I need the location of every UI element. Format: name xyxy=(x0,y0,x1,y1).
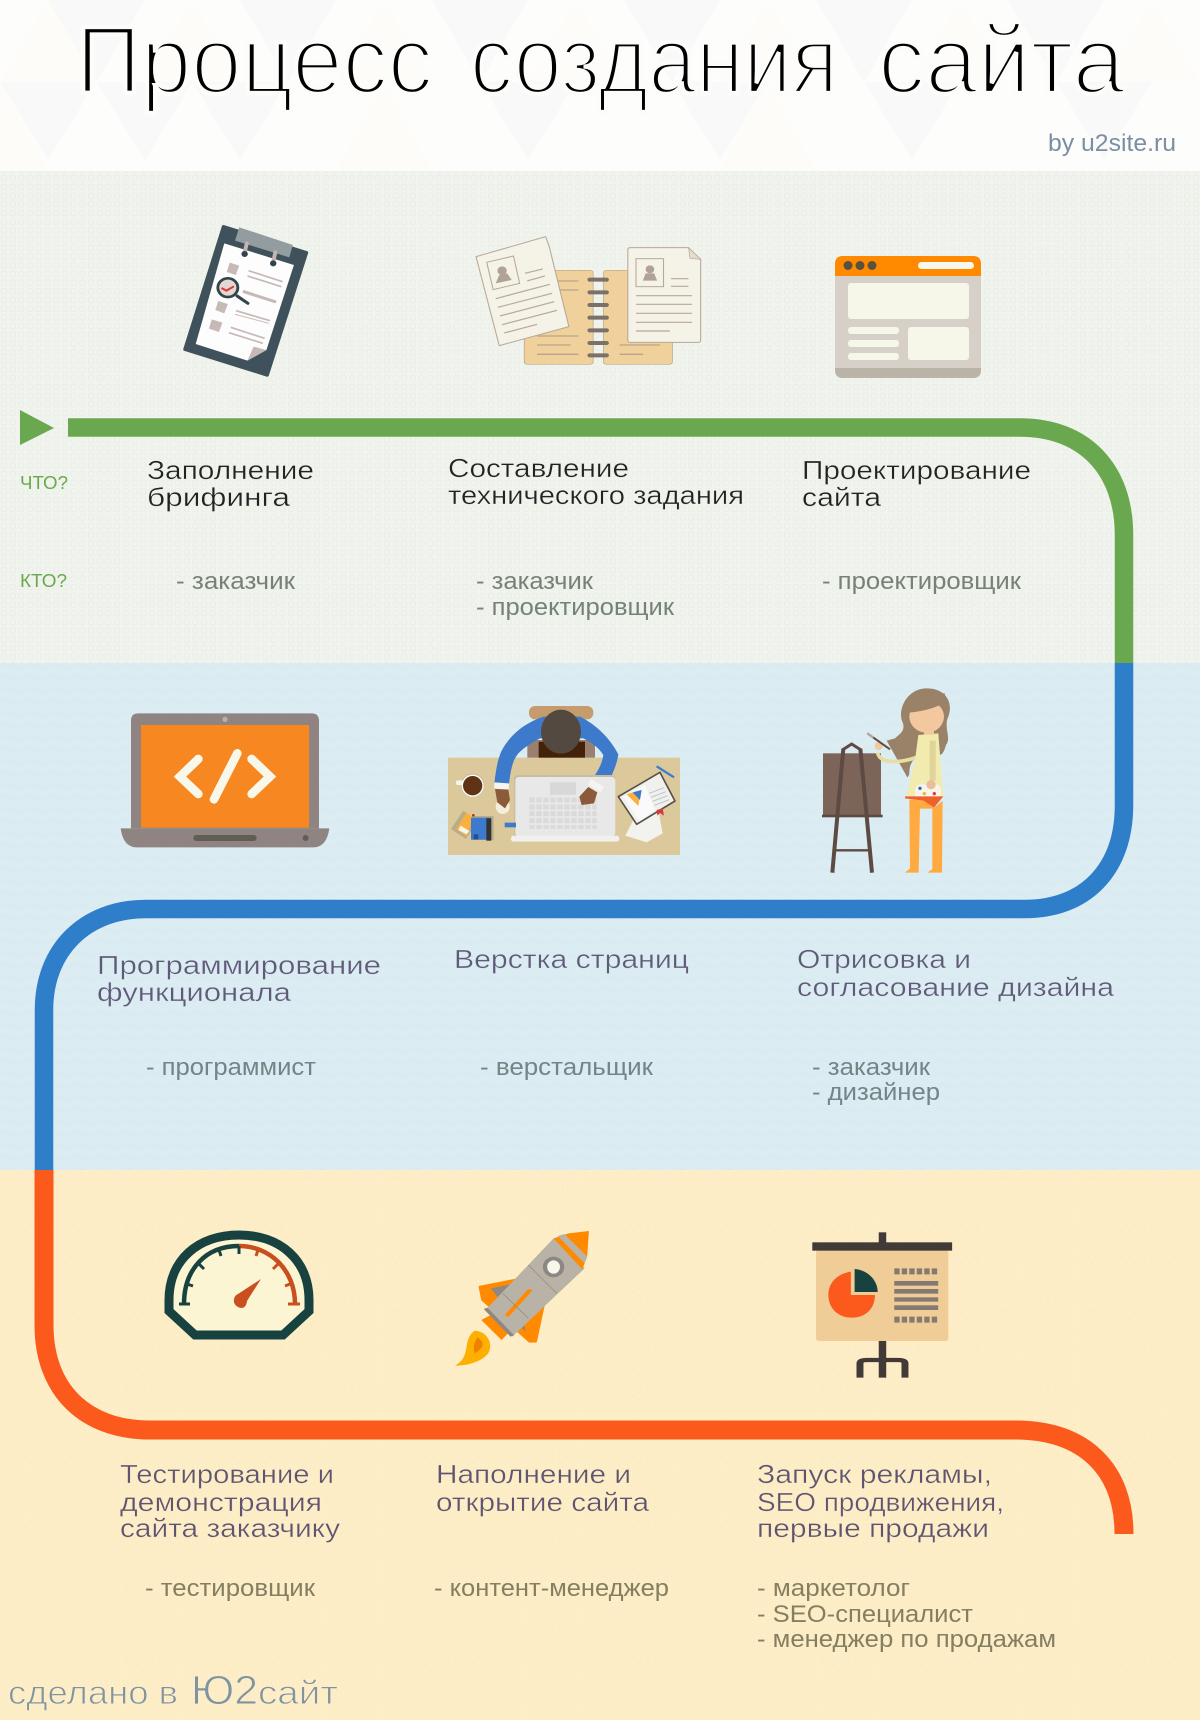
arrow: blue path xyxy=(44,663,1124,1170)
step 2 text: technical specification xyxy=(448,453,744,621)
step 9 text: promotion: SEO продвижения, xyxy=(757,1487,1004,1517)
step 6 text: coding: функционала xyxy=(97,977,292,1007)
icon: laptop with code xyxy=(121,713,329,847)
label: what: ЧТО? xyxy=(20,473,68,493)
step 2 text: technical specification: - проектировщик xyxy=(476,594,674,621)
step 4 text: design: согласование дизайна xyxy=(797,972,1115,1002)
footer credit: сайт xyxy=(258,1674,338,1711)
step 1 text: briefing: Заполнение xyxy=(147,455,314,485)
step 5 text: page layout xyxy=(454,944,689,1081)
step 4 text: design: - дизайнер xyxy=(812,1079,940,1106)
step 7 text: testing: - тестировщик xyxy=(145,1575,315,1602)
step 4 text: design xyxy=(797,944,1115,1106)
step 8 text: content and launch: Наполнение и xyxy=(436,1459,631,1489)
panel: header background xyxy=(0,0,1200,171)
step 9 text: promotion xyxy=(757,1459,1056,1653)
icon: speedometer xyxy=(169,1235,309,1335)
step 4 text: design: - заказчик xyxy=(812,1054,930,1081)
step 8 text: content and launch: открытие сайта xyxy=(436,1487,650,1517)
footer credit: Ю2 xyxy=(191,1667,258,1713)
arrow: green path xyxy=(68,428,1124,663)
title: сайта xyxy=(878,7,1126,114)
step 6 text: coding: Программирование xyxy=(97,950,381,980)
panel: blue section background xyxy=(0,663,1200,1170)
icon: presentation board xyxy=(812,1232,952,1378)
step 7 text: testing: сайта заказчику xyxy=(120,1513,340,1543)
footer credit: сделано в xyxy=(8,1674,178,1711)
step 9 text: promotion: первые продажи xyxy=(757,1513,989,1543)
step 3 text: site design: - проектировщик xyxy=(822,568,1021,595)
step 5 text: page layout: Верстка страниц xyxy=(454,944,689,974)
step 2 text: technical specification: - заказчик xyxy=(476,568,593,595)
byline: by u2site.ru xyxy=(1048,130,1176,157)
icon: clipboard xyxy=(185,227,306,375)
step 8 text: content and launch xyxy=(434,1459,669,1602)
step 9 text: promotion: - маркетолог xyxy=(757,1575,910,1602)
step 3 text: site design xyxy=(802,455,1031,595)
panel: green section background xyxy=(0,171,1200,663)
step 4 text: design: Отрисовка и xyxy=(797,944,971,974)
icon: designer at easel xyxy=(822,688,950,873)
panel: orange section background xyxy=(0,1170,1200,1720)
step 2 text: technical specification: технического задания xyxy=(448,480,744,510)
icon: browser wireframe xyxy=(835,256,981,378)
step 7 text: testing: Тестирование и xyxy=(120,1459,334,1489)
step 5 text: page layout: - верстальщик xyxy=(480,1054,653,1081)
step 7 text: testing: демонстрация xyxy=(120,1487,322,1517)
label: who: КТО? xyxy=(20,571,67,591)
title: создания xyxy=(470,7,838,114)
arrow: start triangle xyxy=(20,410,54,445)
step 9 text: promotion: - менеджер по продажам xyxy=(757,1626,1056,1653)
title xyxy=(76,7,1126,114)
footer credit xyxy=(8,1667,338,1713)
step 8 text: content and launch: - контент-менеджер xyxy=(434,1575,669,1602)
step 2 text: technical specification: Составление xyxy=(448,453,629,483)
step 1 text: briefing xyxy=(147,455,314,595)
step 1 text: briefing: - заказчик xyxy=(176,568,295,595)
step 1 text: briefing: брифинга xyxy=(147,482,291,512)
arrow: orange path xyxy=(44,1170,1124,1534)
step 9 text: promotion: - SEO-специалист xyxy=(757,1601,973,1628)
title: Процесс xyxy=(76,7,433,114)
step 9 text: promotion: Запуск рекламы, xyxy=(757,1459,992,1489)
step 6 text: coding xyxy=(97,950,381,1081)
step 6 text: coding: - программист xyxy=(146,1054,316,1081)
icon: spiral notebook with resumes xyxy=(476,237,701,364)
icon: rocket xyxy=(455,1231,589,1366)
step 3 text: site design: Проектирование xyxy=(802,455,1031,485)
step 3 text: site design: сайта xyxy=(802,482,882,512)
icon: developer at desk xyxy=(448,706,680,855)
step 7 text: testing xyxy=(120,1459,340,1602)
